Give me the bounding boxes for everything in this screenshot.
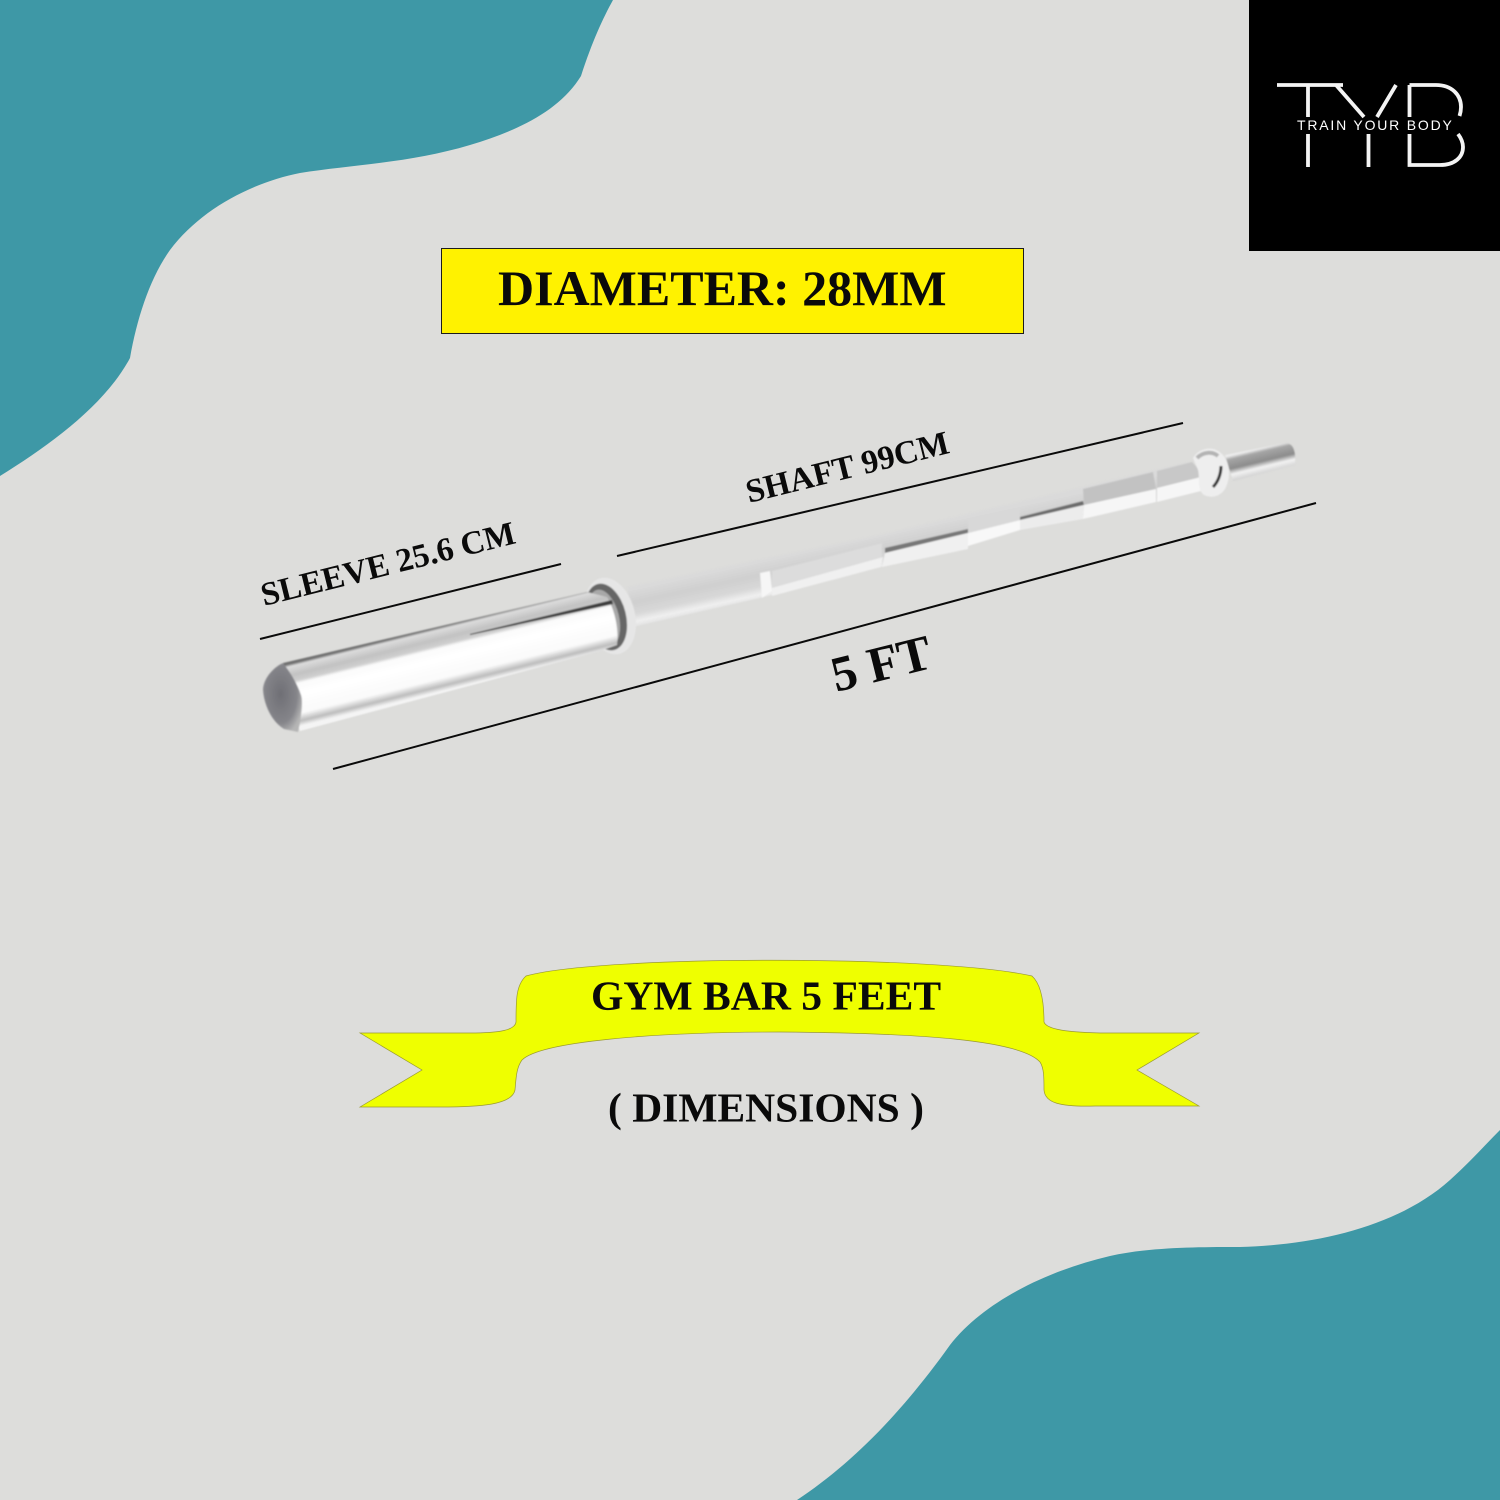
subtitle: dimensions: ( DIMENSIONS ) bbox=[608, 1084, 924, 1132]
diameter label: DIAMETER: 28MM bbox=[498, 260, 947, 316]
label: sleeve length: SLEEVE 25.6 CM bbox=[257, 515, 519, 614]
right collar bbox=[1193, 449, 1229, 497]
banner title: GYM BAR 5 FEET bbox=[591, 972, 941, 1018]
dimension line: overall length bbox=[333, 503, 1316, 769]
left collar bbox=[576, 572, 644, 660]
shaft sections bbox=[760, 462, 1205, 598]
dimension line: sleeve bbox=[260, 564, 561, 639]
dimension line: shaft bbox=[617, 423, 1183, 556]
left sleeve bbox=[283, 592, 618, 731]
sleeve shadow line bbox=[470, 600, 613, 635]
barbell bbox=[263, 443, 1295, 732]
teal wave: top left bbox=[0, 0, 613, 476]
teal wave: bottom right bbox=[797, 1130, 1500, 1500]
label: shaft length: SHAFT 99CM bbox=[742, 425, 953, 511]
label: overall length: 5 FT bbox=[825, 624, 937, 703]
ribbon banner bbox=[360, 960, 1199, 1107]
right stub bbox=[1225, 443, 1295, 481]
logo monogram letters bbox=[1277, 85, 1463, 167]
diameter label bbox=[442, 248, 1024, 334]
sleeve end cap bbox=[263, 663, 302, 732]
logo: TYB Train Your Body bbox=[1249, 0, 1500, 251]
logo tagline: TRAIN YOUR BODY bbox=[1297, 117, 1454, 133]
barbell shaft bbox=[627, 462, 1204, 627]
